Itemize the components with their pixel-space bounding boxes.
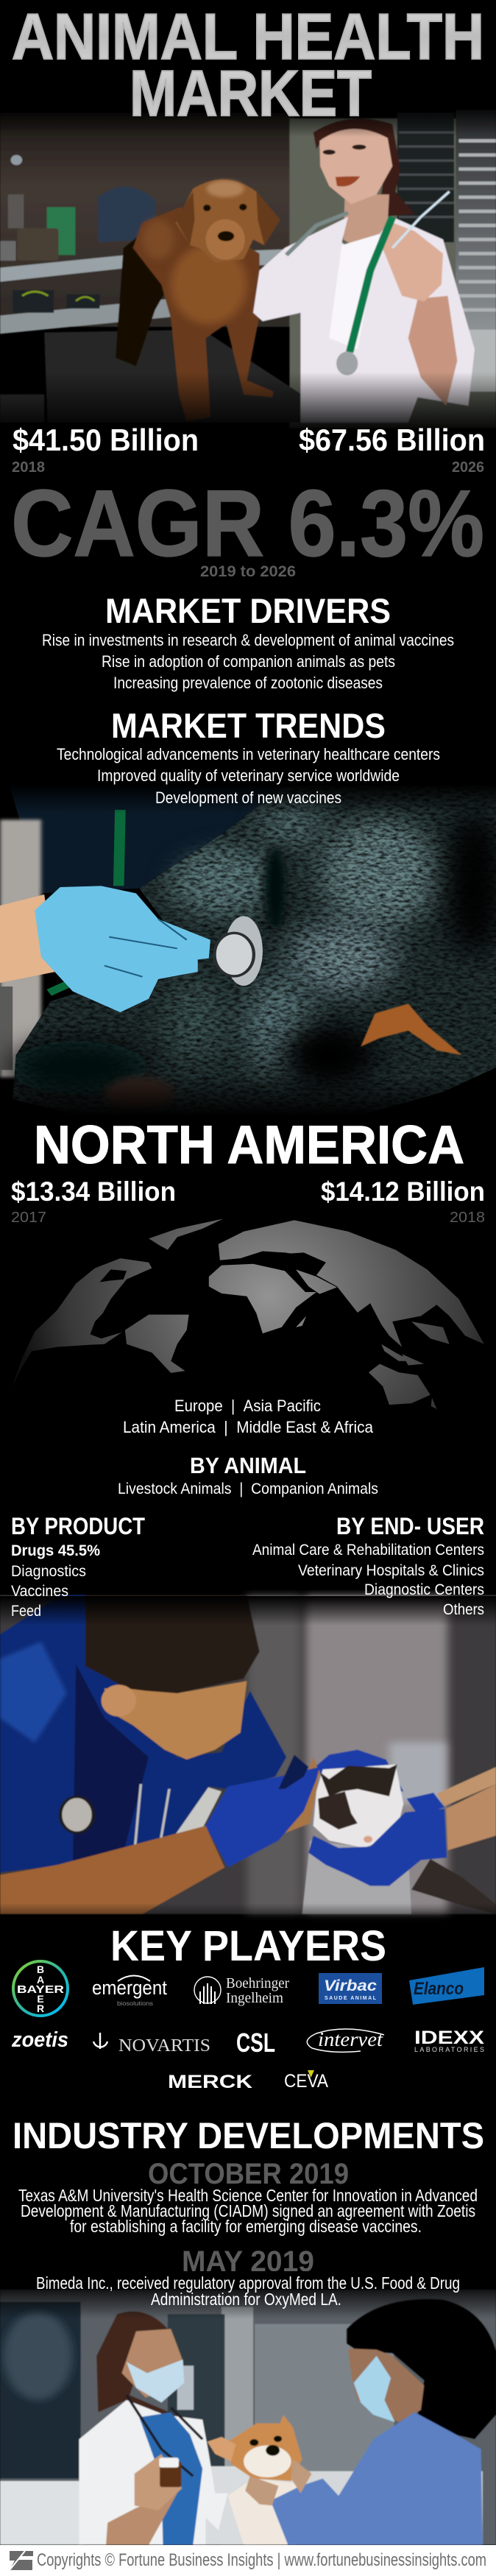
fur dark shadow bottom left bbox=[10, 1040, 149, 1095]
black band under photo bbox=[0, 1933, 496, 2286]
doctor eyes bbox=[323, 144, 366, 155]
doctor smile bbox=[336, 176, 360, 186]
logo: Bayer: A bbox=[37, 1974, 44, 1986]
dog ears bbox=[176, 191, 280, 245]
scrub shadow bbox=[73, 1664, 149, 1865]
left backdrop bbox=[0, 819, 41, 1077]
logo: Emergent: biosolutions bbox=[117, 2000, 153, 2007]
dog forehead light bbox=[206, 180, 244, 197]
cat head dark left patch bbox=[318, 1791, 358, 1829]
stethoscope chest piece bbox=[336, 352, 358, 375]
heading: north america: NORTH AMERICA bbox=[34, 1115, 464, 1175]
list: by product bbox=[11, 1542, 100, 1620]
text: May 2019 development bbox=[36, 2273, 460, 2309]
bright gap behind arm bbox=[171, 1787, 222, 1838]
photo bottom fade bbox=[0, 1075, 496, 1116]
logo: Novartis bbox=[93, 2033, 210, 2055]
dog fur main bbox=[13, 786, 496, 1119]
first vet hair bbox=[96, 2312, 187, 2435]
table bbox=[44, 330, 345, 423]
fur dark shadow mid bbox=[264, 847, 287, 930]
photo: vet with dog and syringe bbox=[0, 110, 496, 428]
lower right wall bbox=[459, 330, 496, 392]
list: by product: Feed bbox=[11, 1603, 41, 1620]
backdrop dark bbox=[0, 1595, 496, 1914]
second vet hair bbox=[347, 2298, 496, 2439]
greenland bbox=[149, 1218, 223, 1250]
man's arm bbox=[0, 1826, 224, 1914]
second vet hands bbox=[245, 2459, 312, 2505]
top band behind text bbox=[0, 2271, 496, 2282]
first vet forearm bbox=[106, 2494, 177, 2545]
logo: Elanco bbox=[409, 1967, 484, 2005]
cat head white bbox=[313, 1765, 403, 1848]
logo: Bayer: B bbox=[37, 1963, 44, 1975]
list: market trends: Technological advancements in veterinary healthcare centers bbox=[57, 745, 440, 763]
second vet mask bbox=[354, 2356, 395, 2422]
mediterranean and red sea bbox=[222, 1259, 312, 1291]
logo: IDEXX: LABORATORIES bbox=[414, 2046, 484, 2053]
dog muzzle bbox=[206, 219, 245, 260]
list: market trends bbox=[57, 745, 440, 807]
left door lower bbox=[206, 2466, 256, 2545]
bottle cap bbox=[159, 2457, 179, 2468]
madagascar bbox=[296, 1316, 306, 1327]
logo: Merck: MERCK bbox=[168, 2072, 252, 2092]
other regions: Latin America | Middle East & Africa bbox=[123, 1418, 374, 1436]
logo: IDEXX bbox=[414, 2028, 484, 2053]
stat: 2026 market size bbox=[299, 423, 485, 476]
scrub highlights bbox=[0, 1642, 66, 1743]
photo top fade bbox=[0, 784, 496, 814]
stethoscope collar bbox=[286, 213, 348, 255]
canadian bay bbox=[99, 1269, 127, 1282]
doctor hair bbox=[313, 119, 414, 217]
stethoscope tubes bbox=[135, 1784, 169, 1853]
white panel left bbox=[0, 2481, 84, 2545]
stat: 2026 market size: $67.56 Billion bbox=[299, 423, 485, 457]
fur dark right edge bbox=[446, 810, 496, 957]
door glass right bbox=[255, 2324, 394, 2471]
stethoscope bbox=[127, 2395, 202, 2476]
title bbox=[12, 0, 484, 130]
lower shelf bbox=[0, 299, 171, 334]
first vet scrubs bbox=[139, 2413, 202, 2545]
list: by end-user: Veterinary Hospitals & Clinics bbox=[298, 1562, 484, 1579]
list: market trends: Development of new vaccines bbox=[155, 788, 341, 807]
photo top fade bbox=[0, 1596, 496, 1626]
doctor neck bbox=[344, 194, 389, 253]
pill bottle bbox=[160, 2461, 181, 2487]
logo: Bayer: E bbox=[37, 1993, 44, 2005]
doctor forearm bbox=[408, 296, 457, 406]
corgi ear bbox=[208, 2437, 235, 2461]
logo: Virbac bbox=[319, 1973, 382, 2004]
year 2018: 2018 bbox=[450, 1210, 485, 1226]
first vet hand bbox=[135, 2454, 182, 2510]
heading: key players: KEY PLAYERS bbox=[110, 1922, 386, 1970]
logo: Bayer: BAYER bbox=[17, 1983, 64, 1996]
photo: vets with corgi bbox=[0, 2290, 496, 2545]
left window bbox=[0, 2302, 81, 2479]
title line 2: MARKET bbox=[130, 57, 372, 130]
upper shelf items bbox=[0, 155, 155, 261]
ear bbox=[102, 1684, 136, 1717]
photo top fade bbox=[0, 103, 496, 137]
window blinds dark bbox=[397, 113, 454, 242]
fur light upper right bbox=[319, 819, 440, 928]
north america bbox=[12, 1258, 152, 1388]
shelf bbox=[0, 250, 285, 282]
stat: 2018 market size bbox=[12, 423, 199, 476]
year 2026: 2026 bbox=[452, 459, 484, 476]
list: market drivers: Rise in adoption of companion animals as pets bbox=[102, 652, 395, 671]
cat tail fur bbox=[411, 1859, 496, 1914]
window blinds light bbox=[456, 110, 496, 335]
list: market trends: Improved quality of veterinary service worldwide bbox=[97, 766, 400, 785]
logo: Boehringer Ingelheim: Boehringer bbox=[226, 1975, 289, 1991]
room right wall bbox=[289, 119, 496, 428]
corgi body bbox=[228, 2479, 300, 2545]
hair bbox=[85, 1595, 260, 1693]
doctor t-shirt bbox=[329, 234, 380, 350]
wall bbox=[0, 2290, 496, 2545]
lower stethoscope tube bbox=[49, 984, 68, 992]
south america bbox=[125, 1315, 189, 1373]
doctor face bbox=[319, 129, 392, 204]
fur texture bbox=[13, 786, 496, 1119]
arm bbox=[0, 894, 55, 983]
orange chest patch bbox=[361, 1003, 462, 1055]
second vet face bbox=[348, 2349, 424, 2422]
door pale panel bbox=[255, 2471, 483, 2545]
stat: 2018 market size: $41.50 Billion bbox=[13, 423, 199, 457]
list: market drivers: Increasing prevalence of zootonic diseases bbox=[113, 674, 383, 692]
list: by product: Diagnostics bbox=[11, 1563, 86, 1580]
logo: Emergent bbox=[92, 1976, 167, 2007]
upper arm on right bbox=[285, 1757, 319, 1833]
photo: vet examining cat bbox=[0, 1595, 496, 1914]
doctor hand bbox=[381, 222, 443, 301]
corgi head bbox=[228, 2415, 302, 2481]
dog chest highlight bbox=[171, 245, 247, 324]
logo: Boehringer Ingelheim: Ingelheim bbox=[226, 1990, 283, 2006]
eurasia bbox=[219, 1220, 484, 1347]
cat body bbox=[302, 1841, 411, 1914]
scrubs bbox=[0, 1595, 286, 1872]
glove bbox=[35, 886, 210, 1012]
syringe bbox=[392, 191, 450, 248]
text: October 2019 development: for establishing a facility for emerging disease vaccines. bbox=[70, 2217, 422, 2236]
logo: IDEXX: IDEXX bbox=[414, 2028, 484, 2048]
door frame bbox=[222, 2307, 253, 2545]
year 2018: 2018 bbox=[12, 459, 45, 476]
shelf bins bbox=[13, 290, 99, 313]
otoscope bbox=[278, 1754, 308, 1789]
photo: gloved hand with stethoscope on dog bbox=[0, 786, 496, 1119]
list: by end-user bbox=[252, 1542, 484, 1618]
logo: Virbac: SAUDE ANIMAL bbox=[325, 1996, 377, 2001]
new zealand tip bbox=[431, 1398, 436, 1409]
first vet mask bbox=[127, 2360, 184, 2402]
corgi eyes and nose bbox=[249, 2435, 282, 2456]
black sea bbox=[282, 1252, 316, 1260]
text: May 2019 development: Administration for OxyMed LA. bbox=[151, 2290, 341, 2309]
logo: Intervet: intervet bbox=[318, 2028, 384, 2050]
list: by animal: Livestock Animals | Companion Animals bbox=[118, 1481, 378, 1497]
glove creases bbox=[104, 919, 187, 977]
fur top bbox=[256, 800, 326, 849]
dog body bbox=[133, 207, 274, 421]
upper glove on cat bbox=[316, 1750, 403, 1791]
photo top fade bbox=[0, 2282, 496, 2319]
left floor band bbox=[0, 395, 44, 423]
first vet face bbox=[122, 2329, 182, 2398]
dog back highlight bbox=[143, 220, 174, 259]
left lower dim bbox=[0, 987, 13, 1070]
logo: Boehringer Ingelheim bbox=[194, 1975, 289, 2006]
world globe map bbox=[12, 1218, 484, 1409]
date: May 2019: MAY 2019 bbox=[182, 2245, 314, 2278]
logo: Elanco: Elanco bbox=[414, 1979, 464, 1999]
fur light centre bbox=[168, 844, 275, 918]
stethoscope front disc bbox=[215, 933, 254, 976]
list: market drivers bbox=[42, 631, 454, 692]
list: by product: Drugs 45.5% bbox=[11, 1542, 100, 1559]
stethoscope tube bbox=[118, 810, 120, 886]
face bbox=[104, 1681, 247, 1760]
stethoscope head bbox=[60, 1797, 93, 1832]
cat head dark top bbox=[319, 1765, 397, 1796]
stat: 2017 regional size bbox=[11, 1176, 176, 1226]
photo bottom fade bbox=[0, 372, 496, 434]
list: by product: Vaccines bbox=[11, 1583, 68, 1600]
first vet coat bbox=[79, 2400, 228, 2545]
paper on glass bbox=[177, 2365, 194, 2410]
black band under photo bbox=[0, 1116, 496, 1598]
heading: by animal: BY ANIMAL bbox=[190, 1453, 306, 1478]
fur dark shadow right bbox=[282, 1023, 377, 1087]
stat: 2018 regional size: $14.12 Billion bbox=[321, 1176, 485, 1207]
room wall bbox=[0, 113, 294, 327]
window reflection bbox=[3, 2312, 73, 2400]
year 2017: 2017 bbox=[11, 1210, 46, 1226]
stethoscope tube bbox=[350, 217, 392, 352]
fur mid lower bbox=[168, 977, 224, 1060]
door glass centre bbox=[168, 2314, 224, 2466]
brown lower patch bbox=[104, 1077, 174, 1112]
africa bbox=[209, 1264, 316, 1333]
stat: 2018 regional size bbox=[321, 1176, 485, 1226]
photo bottom fade bbox=[0, 1903, 496, 1933]
corgi muzzle bbox=[244, 2446, 291, 2477]
heading: by product: BY PRODUCT bbox=[11, 1513, 145, 1539]
far glove bbox=[407, 1793, 444, 1815]
solid black below photo bbox=[0, 434, 496, 784]
southeast asia islands bbox=[381, 1321, 450, 1365]
other regions bbox=[123, 1397, 374, 1436]
icon: Fortune Business Insights logo bbox=[10, 2551, 33, 2570]
heading: market drivers: MARKET DRIVERS bbox=[105, 591, 391, 630]
CAGR period: 2019 to 2026 bbox=[200, 563, 296, 580]
right arm lower bbox=[446, 1784, 496, 1850]
second vet top bbox=[271, 2413, 483, 2545]
arabia bbox=[296, 1269, 337, 1294]
logo: Zoetis: zoetis bbox=[11, 2028, 68, 2052]
dog head bbox=[176, 180, 280, 262]
logo: Virbac: Virbac bbox=[324, 1977, 377, 1994]
list: by end-user: Others bbox=[443, 1601, 484, 1618]
footer band bbox=[0, 2545, 496, 2576]
text: October 2019 development bbox=[18, 2186, 478, 2236]
heading: market trends: MARKET TRENDS bbox=[111, 706, 386, 745]
scrubs bbox=[10, 786, 285, 893]
logo: CSL: CSL bbox=[236, 2028, 275, 2058]
backdrop curtain light bbox=[305, 1595, 447, 1914]
logo: Emergent: emergent bbox=[92, 1977, 167, 1999]
dog eyes and nose bbox=[203, 204, 247, 241]
stat: 2017 regional size: $13.34 Billion bbox=[11, 1176, 176, 1207]
man's glove bbox=[206, 1767, 319, 1868]
doctor coat bbox=[253, 217, 475, 423]
logo: Bayer: R bbox=[37, 2002, 44, 2014]
date: October 2019: OCTOBER 2019 bbox=[148, 2158, 349, 2190]
other regions: Europe | Asia Pacific bbox=[174, 1397, 321, 1415]
cat nose bbox=[364, 1836, 372, 1843]
backdrop pale lower bbox=[389, 1743, 446, 1804]
australia bbox=[369, 1364, 431, 1405]
stethoscope rear disc bbox=[224, 916, 263, 986]
dog rear legs bbox=[116, 225, 171, 367]
backdrop mid bbox=[247, 1595, 300, 1914]
list: by end-user: Diagnostic Centers bbox=[364, 1581, 484, 1598]
logo: Novartis: NOVARTIS bbox=[118, 2036, 210, 2055]
logo: Bayer bbox=[13, 1961, 68, 2016]
fur light lower bbox=[244, 974, 313, 1073]
logo: Ceva: CEVA bbox=[284, 2071, 328, 2092]
right arms bbox=[436, 1767, 496, 1806]
holding glove bbox=[308, 1809, 447, 1886]
fur light mid right bbox=[288, 920, 396, 994]
